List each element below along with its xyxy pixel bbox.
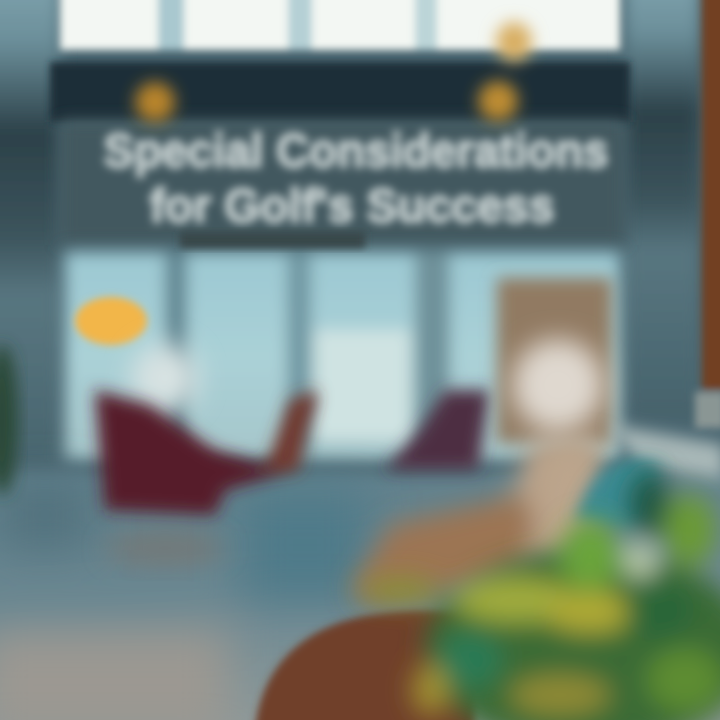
grey sofa back (610, 425, 720, 480)
title: for Golf's Success (150, 180, 554, 233)
side columns (0, 0, 700, 490)
tan sofa (350, 440, 600, 605)
left seated figure and chair (131, 344, 199, 412)
right chair dark (385, 390, 490, 470)
dark title panel (60, 120, 625, 245)
floor reflections (0, 480, 370, 720)
brown foreground armchair (255, 610, 475, 720)
upper window strip (60, 0, 620, 50)
dark ceiling beam (50, 62, 630, 122)
tan wall panel (497, 278, 612, 443)
orange lamp (75, 297, 147, 345)
pendant lights (135, 22, 532, 122)
left plant (0, 345, 18, 495)
title (104, 125, 608, 233)
left maroon chair (95, 390, 318, 515)
title: Special Considerations (104, 125, 608, 178)
chair floor shadow (105, 530, 225, 566)
wood panel right (695, 0, 720, 428)
teal cushion (575, 460, 660, 530)
light cushion figure (505, 339, 604, 560)
foreground plant (360, 471, 720, 720)
dark sill under title (180, 232, 365, 248)
floor (0, 472, 720, 720)
lower window (65, 250, 620, 460)
